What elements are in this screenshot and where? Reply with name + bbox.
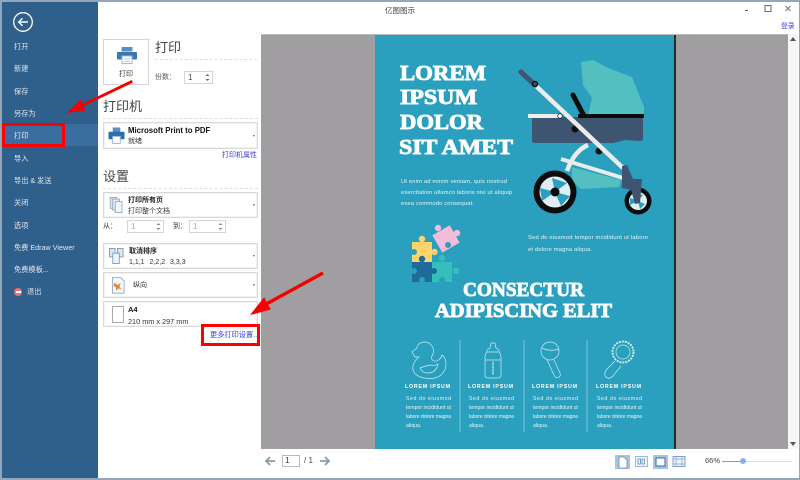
column dividers [460, 340, 587, 432]
nav item: 免费模板... [14, 265, 49, 274]
icon: bottle [485, 343, 501, 378]
icon: pages [110, 197, 122, 213]
copies label: 份数： [155, 74, 176, 81]
panel: preview area [261, 34, 788, 449]
icon: paper [112, 306, 124, 323]
poster title: IPSUM [400, 85, 477, 109]
more print settings link: 更多打印设置... [210, 330, 259, 339]
column 3 text: aliqua. [533, 423, 548, 429]
nav item: 另存为 [14, 109, 36, 118]
poster subtitle: CONSECTUR [463, 279, 584, 301]
piece: pink [432, 225, 460, 253]
from spinner [127, 220, 164, 233]
handle [521, 72, 535, 85]
column 3 text: Sed do eiusmod [533, 396, 578, 402]
column 1 text: tempor incididunt ut [406, 405, 452, 411]
column 1 text [406, 396, 452, 429]
print button [103, 39, 149, 85]
printer properties link: 打印机属性 [222, 152, 257, 159]
column 2 text: tempor incididunt ut [469, 405, 515, 411]
secondary text: Sed do eiusmod tempor incididunt ut labore [528, 235, 648, 241]
copies spinner [184, 71, 213, 84]
panel: sidebar navigation [2, 2, 98, 478]
selector: paper size [103, 301, 258, 327]
column headings: LOREM IPSUM [532, 384, 578, 390]
selector text: 打印所有页 [128, 197, 163, 204]
printer status: 就绪 [128, 138, 142, 145]
canopy [581, 60, 644, 115]
page navigation: 1 [285, 456, 289, 465]
selector: orientation [103, 272, 258, 298]
icon: exit [14, 288, 22, 296]
carriage body [532, 117, 643, 143]
paper name: A4 [128, 304, 138, 314]
icon: printer [117, 47, 137, 64]
front leg [567, 145, 588, 171]
printer name: Microsoft Print to PDF [128, 126, 210, 135]
frame shadow joints [572, 126, 578, 132]
window controls [745, 5, 791, 12]
column headings: LOREM IPSUM [596, 384, 642, 390]
fork [622, 165, 642, 204]
poster [375, 35, 676, 449]
scrollbar [788, 34, 798, 449]
nav item: print: 打印 [14, 131, 28, 140]
column 2 text [469, 396, 515, 429]
nav item: 保存 [14, 87, 28, 96]
secondary text [528, 235, 648, 253]
icon: printer [108, 127, 125, 144]
poster title: DOLOR [400, 110, 484, 134]
icon: ring rattle [605, 342, 634, 378]
selector subtext: 打印整个文档 [128, 208, 170, 215]
column 3 text: tempor incididunt ut [533, 405, 579, 411]
piece: yellow [412, 236, 438, 262]
poster title: SIT AMET [399, 135, 513, 159]
poster intro text: exea commodo consequat. [401, 201, 474, 207]
column 4 text: tempor incididunt ut [597, 405, 643, 411]
nav item: 新建 [14, 64, 28, 73]
column 4 text [597, 396, 643, 429]
piece: teal [432, 255, 459, 282]
from label: 从： [103, 223, 117, 230]
small wheel [624, 188, 652, 214]
callout: highlight print [2, 123, 65, 147]
icon: back arrow [13, 12, 33, 32]
from spinner: 1 [131, 222, 135, 231]
selector text: 取消排序 [129, 248, 157, 254]
column 3 text: labore dolore magna [533, 414, 578, 420]
main frame [535, 85, 623, 168]
icon: collate [109, 248, 124, 264]
selector text: 纵向 [133, 282, 147, 289]
copies spinner: 1 [188, 73, 192, 82]
icon: portrait page [112, 277, 125, 294]
button label: 打印 [119, 71, 133, 78]
arrow: to print menu item [67, 80, 133, 113]
big wheel [534, 170, 576, 214]
zoom level: 66% [705, 456, 720, 465]
to spinner [189, 220, 226, 233]
column 4 text: aliqua. [597, 423, 612, 429]
column 3 text [533, 396, 579, 429]
heading: print: 打印 [155, 40, 181, 55]
printer selector [103, 122, 258, 149]
window title: 亿图图示 [385, 6, 415, 15]
heading: printer: 打印机 [103, 99, 142, 114]
poster title: LOREM [400, 61, 486, 85]
column headings: LOREM IPSUM [468, 384, 514, 390]
cross bar [561, 159, 623, 178]
column 1 text: Sed do eiusmod [406, 396, 451, 402]
nav item: 打开 [14, 42, 28, 51]
poster intro text [401, 179, 512, 207]
column 2 text: Sed do eiusmod [469, 396, 514, 402]
column 2 text: aliqua. [469, 423, 484, 429]
nav item: 退出 [27, 287, 41, 296]
white bar [528, 114, 561, 118]
icon: rattle [541, 342, 560, 378]
login link: 登录 [781, 23, 795, 30]
column headings [405, 384, 642, 390]
selector subtext: 1,1,1 2,2,2 3,3,3 [129, 258, 186, 266]
selected row highlight [2, 124, 98, 146]
column 1 text: aliqua. [406, 423, 421, 429]
page navigation: / 1 [304, 456, 313, 465]
poster subtitle [435, 279, 612, 322]
poster intro text: exercitation ullamco laboris nisi ut aliquip [401, 190, 512, 196]
to spinner: 1 [193, 222, 197, 231]
view mode icons [615, 455, 686, 469]
illustration: stroller [521, 60, 652, 214]
poster subtitle: ADIPISCING ELIT [435, 300, 612, 322]
nav item: 关闭 [14, 198, 28, 207]
to label: 到： [173, 223, 187, 230]
column headings: LOREM IPSUM [405, 384, 451, 390]
selector: collation [103, 243, 258, 269]
column 2 text: labore dolore magna [469, 414, 514, 420]
paper dimensions: 210 mm x 297 mm [128, 316, 188, 326]
canopy rim and strap [578, 114, 644, 118]
illustration: puzzle pieces [411, 225, 460, 283]
nav item: 导出 & 发送 [14, 176, 52, 185]
column 4 text: labore dolore magna [597, 414, 642, 420]
column 4 text: Sed do eiusmod [597, 396, 642, 402]
selector: pages [103, 192, 258, 218]
nav item: 选项 [14, 221, 28, 230]
page navigation [264, 455, 330, 467]
secondary text: et dolore magna aliqua. [528, 247, 592, 253]
zoom slider [722, 458, 792, 464]
column 1 text: labore dolore magna [406, 414, 451, 420]
arrow: to more settings [250, 272, 324, 315]
lower basket [572, 167, 621, 189]
callout: highlight more settings [201, 324, 260, 346]
nav item: 免费 Edraw Viewer [14, 243, 75, 252]
poster title [399, 61, 513, 159]
nav item: 导入 [14, 154, 28, 163]
piece: dark blue [412, 256, 438, 282]
heading: settings: 设置 [103, 169, 129, 184]
icon: duck [412, 342, 446, 378]
poster intro text: Ut enim ad minim veniam, quis nostrud [401, 179, 507, 185]
